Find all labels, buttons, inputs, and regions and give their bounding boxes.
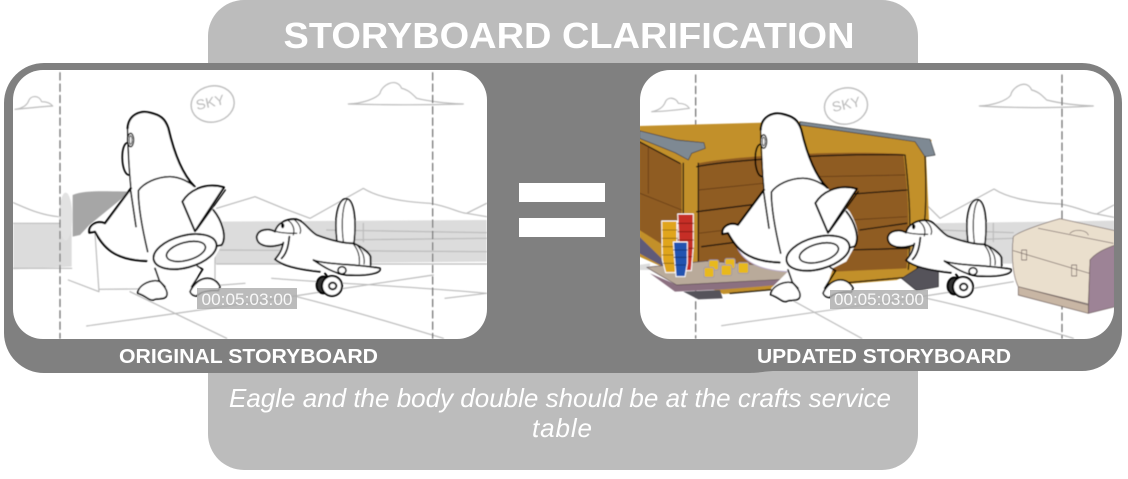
crate <box>639 122 935 294</box>
cloth under eagle <box>736 246 788 272</box>
note text: Eagle and the body double should be at the crafts service <box>229 383 891 413</box>
character: body double plane <box>888 200 1011 297</box>
stacked cups <box>662 214 693 277</box>
luggage case <box>1012 219 1115 313</box>
timecode: 00:05:03:00 <box>834 291 924 309</box>
timecode: 00:05:03:00 <box>202 291 292 309</box>
panel: dark comparison band <box>4 63 1122 373</box>
panel: light title backing <box>208 0 918 470</box>
label: SKY sketch note: SKY <box>830 93 863 115</box>
label: SKY sketch note: SKY <box>194 91 227 113</box>
note text <box>229 383 891 443</box>
small boxes on table <box>704 259 749 277</box>
character: eagle <box>89 112 225 300</box>
character: body double plane <box>257 199 380 296</box>
caption: original storyboard: ORIGINAL STORYBOARD <box>119 346 378 368</box>
background sketch: original scene <box>13 73 487 338</box>
background sketch and colour props <box>638 75 1117 338</box>
note text: table <box>532 413 592 443</box>
title: STORYBOARD CLARIFICATION <box>284 15 854 56</box>
caption: updated storyboard: UPDATED STORYBOARD <box>757 346 1011 368</box>
crate supports <box>902 267 938 291</box>
panel: updated storyboard <box>638 70 1117 339</box>
craft table <box>646 260 788 292</box>
panel: original storyboard <box>13 70 487 339</box>
equals sign <box>519 183 605 237</box>
character: eagle <box>722 113 858 302</box>
